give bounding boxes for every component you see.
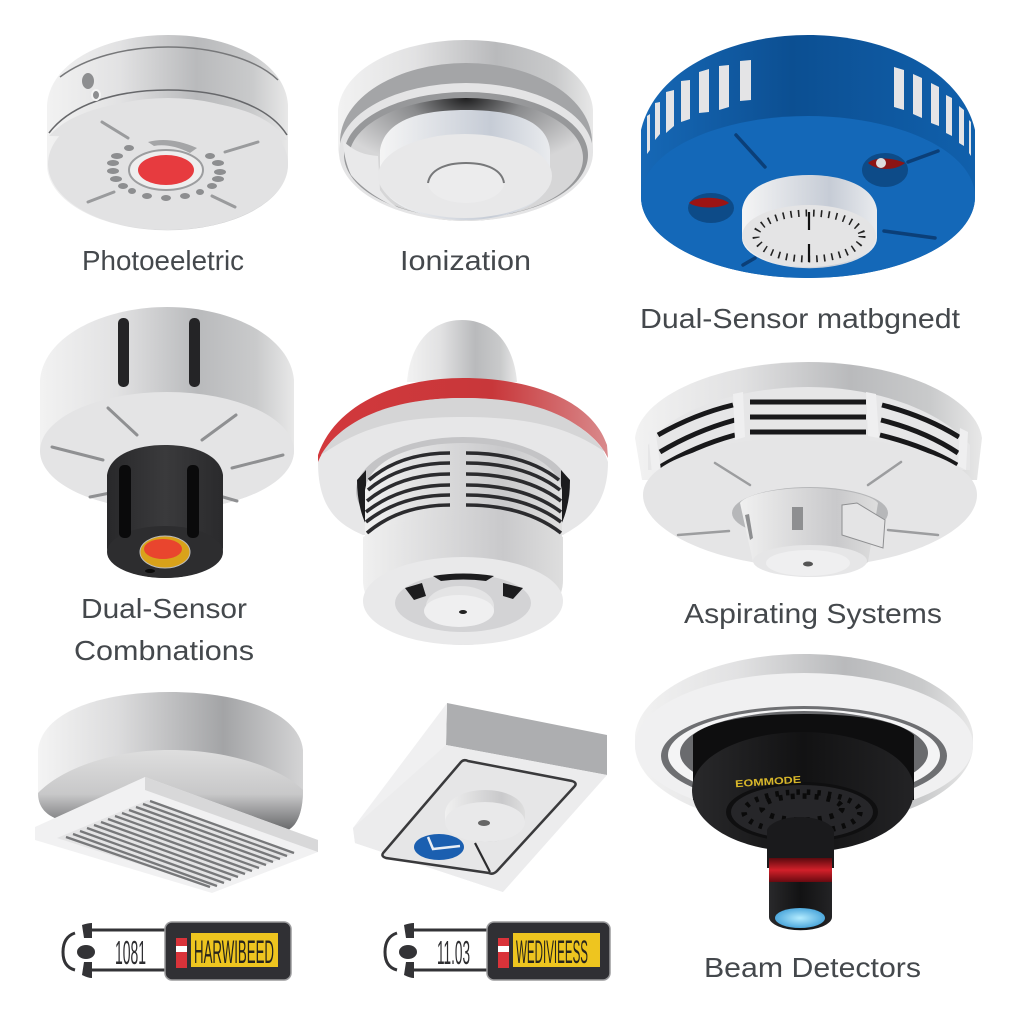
label: Dual-Sensor Combinations	[74, 593, 254, 666]
slats	[66, 801, 294, 887]
grill slots	[366, 453, 561, 533]
detector: beam detector	[635, 654, 973, 930]
brand text: EOMMODE	[735, 775, 802, 790]
vents	[658, 402, 959, 467]
tag: 1103 WEDIVIEESS	[385, 922, 610, 980]
label: Dual-Sensor matbgnedt: Dual-Sensor matbgnedt	[640, 303, 960, 334]
tag: 1081 HARWIBEED: HARWIBEED	[194, 934, 274, 970]
detector: aspirating system	[635, 362, 982, 577]
label: Dual-Sensor Combinations: Combnations	[74, 635, 254, 666]
label: Photoelectric: Photoeeletric	[82, 245, 244, 276]
detector: dual-sensor combination	[40, 307, 294, 578]
lower-left wedge	[343, 141, 412, 214]
detector: dual-sensor blue	[641, 35, 975, 278]
detector: photoelectric	[47, 35, 288, 230]
label: Dual-Sensor Combinations: Dual-Sensor	[81, 593, 247, 624]
text: WEDIVIEESS	[516, 934, 588, 970]
tag: 1103 WEDIVIEESS: 11.03	[437, 934, 470, 971]
vent posts	[648, 392, 968, 474]
vent slots: blue detector	[647, 60, 971, 156]
detector: ionization	[338, 40, 593, 221]
label: Beam Detectors: Beam Detectors	[704, 952, 921, 983]
detector: vented puck	[35, 692, 318, 893]
detector: red-band cone	[318, 320, 608, 645]
detector: square mount	[353, 703, 607, 892]
tag: 1081 HARWIBEED: 1081	[115, 934, 146, 971]
label: Ionization: Ionization	[400, 245, 531, 276]
label: Aspirating Systems: Aspirating Systems	[684, 598, 942, 629]
tag: 1081 HARWIBEED	[63, 922, 291, 980]
